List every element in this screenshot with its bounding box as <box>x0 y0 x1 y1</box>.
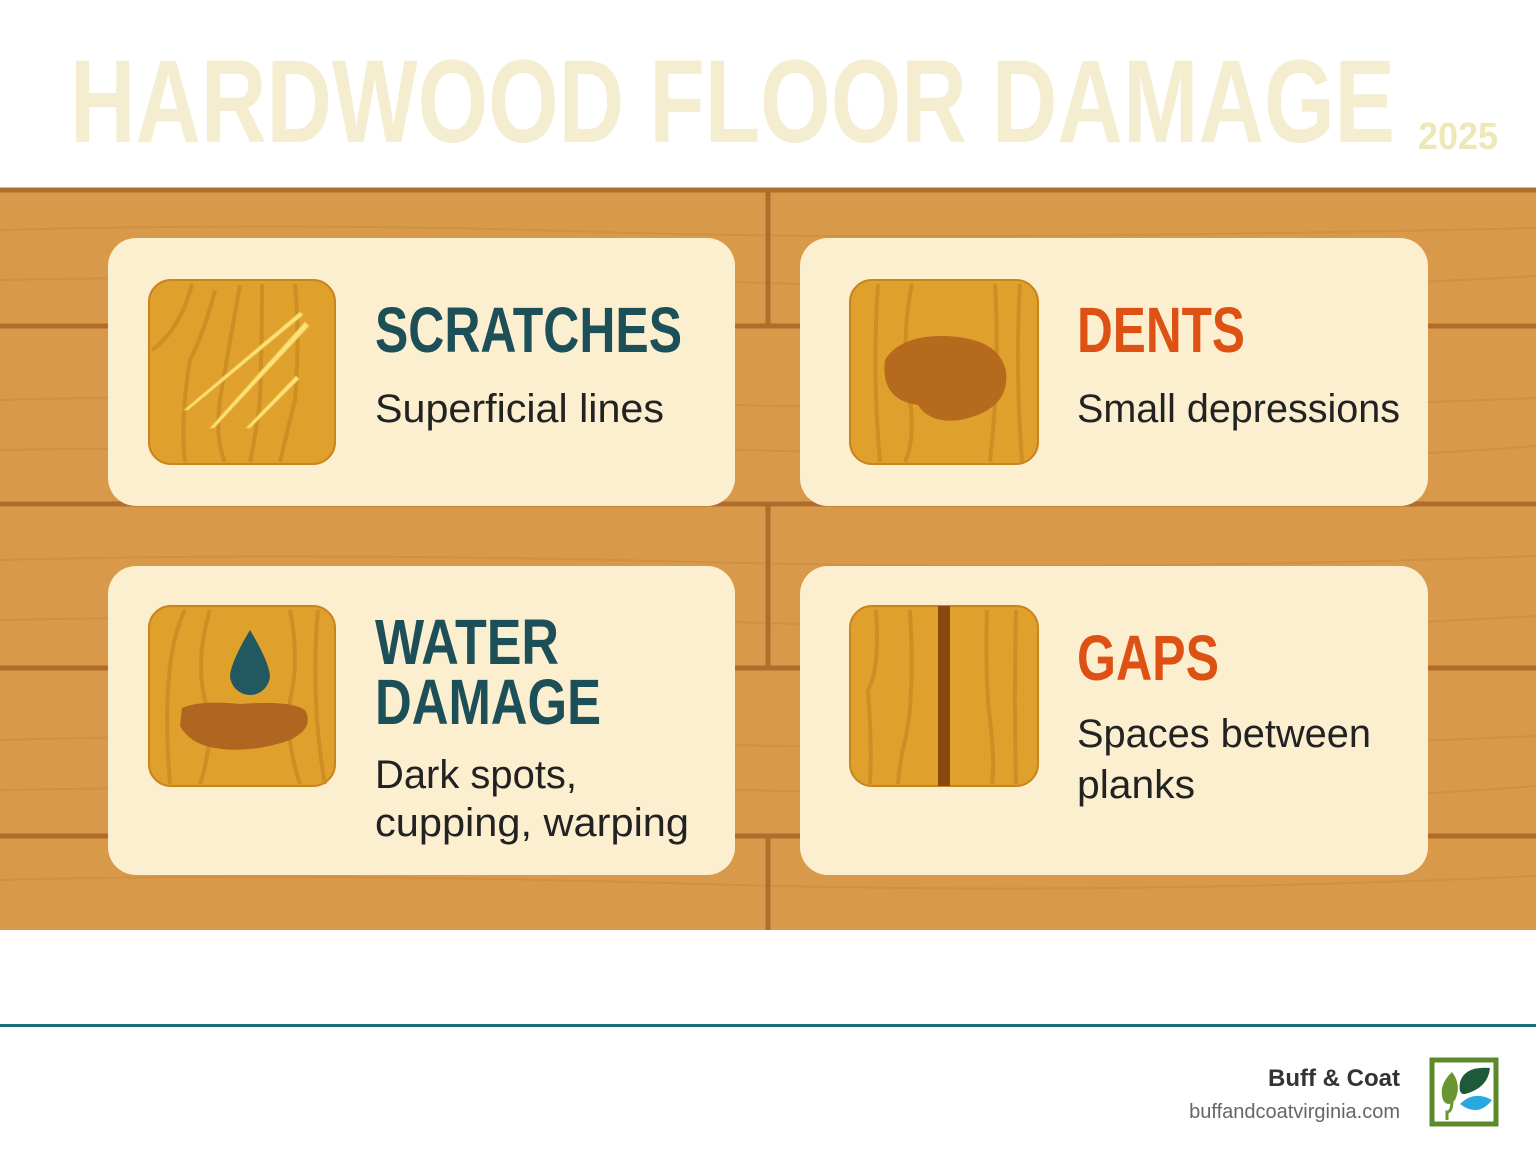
panel: water damage: cupping, warping <box>375 801 689 845</box>
icon: logo <box>1432 1060 1496 1124</box>
icon: dent <box>850 280 1038 464</box>
heading: gaps: GAPS <box>1077 622 1219 694</box>
divider line <box>0 1024 1536 1027</box>
footer brand text: buffandcoatvirginia.com <box>1189 1101 1400 1123</box>
text: water damage description: Dark spots, <box>375 753 577 797</box>
text: gaps description: Spaces between <box>1077 712 1371 756</box>
panel: gaps <box>800 566 1428 875</box>
panel: scratches <box>108 238 735 506</box>
title: 2025 <box>1418 116 1498 158</box>
footer brand text: Buff & Coat <box>1268 1065 1400 1092</box>
heading: scratches: SCRATCHES <box>375 294 682 366</box>
icon: scratches <box>149 280 335 464</box>
icon: water damage <box>149 606 335 786</box>
heading: dents: DENTS <box>1077 294 1245 366</box>
icon: gap <box>850 606 1038 786</box>
wood floor background <box>0 188 1536 930</box>
text: scratches description: Superficial lines <box>375 387 664 431</box>
heading: water damage: WATER <box>375 606 559 678</box>
panel: water damage: DAMAGE <box>375 666 601 738</box>
text: dents description: Small depressions <box>1077 387 1400 431</box>
panel: dents <box>800 238 1428 506</box>
panel: gaps: planks <box>1077 763 1195 807</box>
footer brand text <box>1189 1065 1400 1123</box>
panel: water damage <box>108 566 735 875</box>
